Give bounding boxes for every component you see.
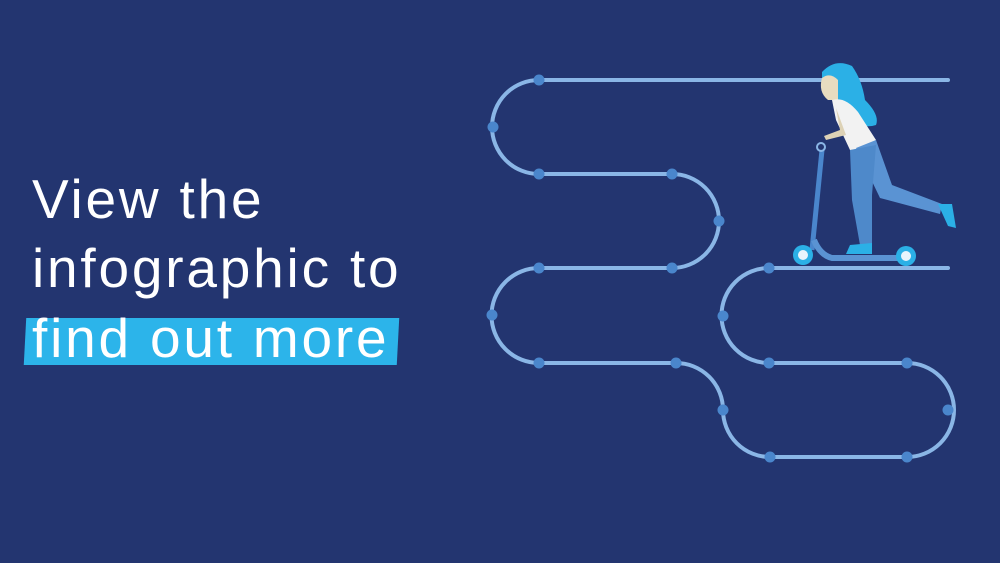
arm	[824, 108, 846, 140]
highlight swash	[24, 318, 399, 365]
title text block	[24, 168, 401, 369]
line 2: infographic to	[32, 237, 401, 299]
road path	[492, 80, 954, 457]
shoes	[938, 204, 956, 228]
face	[821, 75, 838, 100]
back leg	[856, 140, 942, 214]
torso shirt	[832, 99, 876, 150]
line 1: View the	[32, 168, 264, 230]
front leg	[850, 145, 876, 245]
deck	[814, 240, 905, 258]
figure: girl on scooter	[793, 63, 956, 266]
hair	[822, 63, 877, 126]
scooter stem	[812, 150, 822, 250]
wheels	[793, 245, 813, 265]
line 3: find out more	[32, 307, 389, 369]
road dots	[486, 74, 954, 462]
